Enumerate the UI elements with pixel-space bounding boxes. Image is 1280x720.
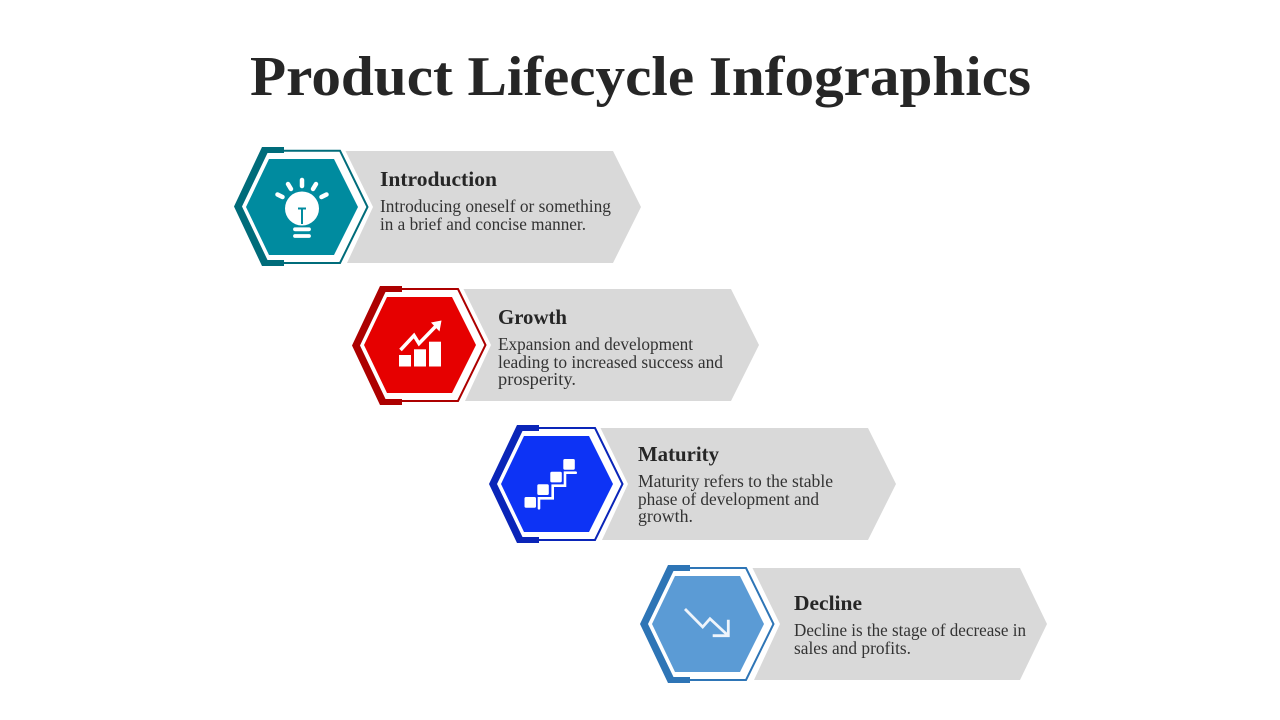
text: Growth description — [498, 334, 723, 389]
text: Decline description — [794, 620, 1026, 658]
arrow banner: Growth — [464, 289, 759, 401]
arrow banner: Introduction — [346, 151, 641, 263]
hexagon badge: Decline — [640, 565, 774, 683]
text: Maturity description — [638, 471, 833, 526]
icon: light bulb — [278, 180, 326, 236]
text: Maturity description: Maturity refers to the stable — [638, 471, 833, 491]
hexagon badge: Maturity — [489, 425, 622, 543]
text: Maturity description: growth. — [638, 506, 693, 526]
text: Growth description: leading to increased success and — [498, 352, 723, 372]
text: Decline description: sales and profits. — [794, 638, 911, 658]
hexagon badge: Growth — [352, 286, 486, 405]
text: Introduction description: in a brief and concise manner. — [380, 214, 586, 234]
text: Growth description: Expansion and development — [498, 334, 693, 354]
heading: Growth: Growth — [498, 305, 567, 329]
icon: rising steps — [524, 459, 576, 508]
title: Product Lifecycle Infographics — [250, 46, 1031, 108]
panel: Maturity — [489, 425, 896, 543]
heading: Introduction: Introduction — [380, 167, 497, 191]
panel: Introduction — [234, 147, 641, 266]
icon: growth chart — [399, 320, 442, 366]
heading: Maturity: Maturity — [638, 442, 719, 466]
hexagon badge: Introduction — [234, 147, 368, 266]
text: Decline description: Decline is the stage of decrease in — [794, 620, 1026, 640]
text: Growth description: prosperity. — [498, 369, 576, 389]
text: Maturity description: phase of development and — [638, 489, 819, 509]
panel: Decline — [640, 565, 1047, 683]
text: Introduction description — [380, 196, 611, 234]
arrow banner: Decline — [752, 568, 1047, 680]
icon: declining arrow — [685, 609, 728, 636]
text: Introduction description: Introducing oneself or something — [380, 196, 611, 216]
heading: Decline: Decline — [794, 591, 862, 615]
arrow banner: Maturity — [600, 428, 896, 540]
panel: Growth — [352, 286, 759, 405]
